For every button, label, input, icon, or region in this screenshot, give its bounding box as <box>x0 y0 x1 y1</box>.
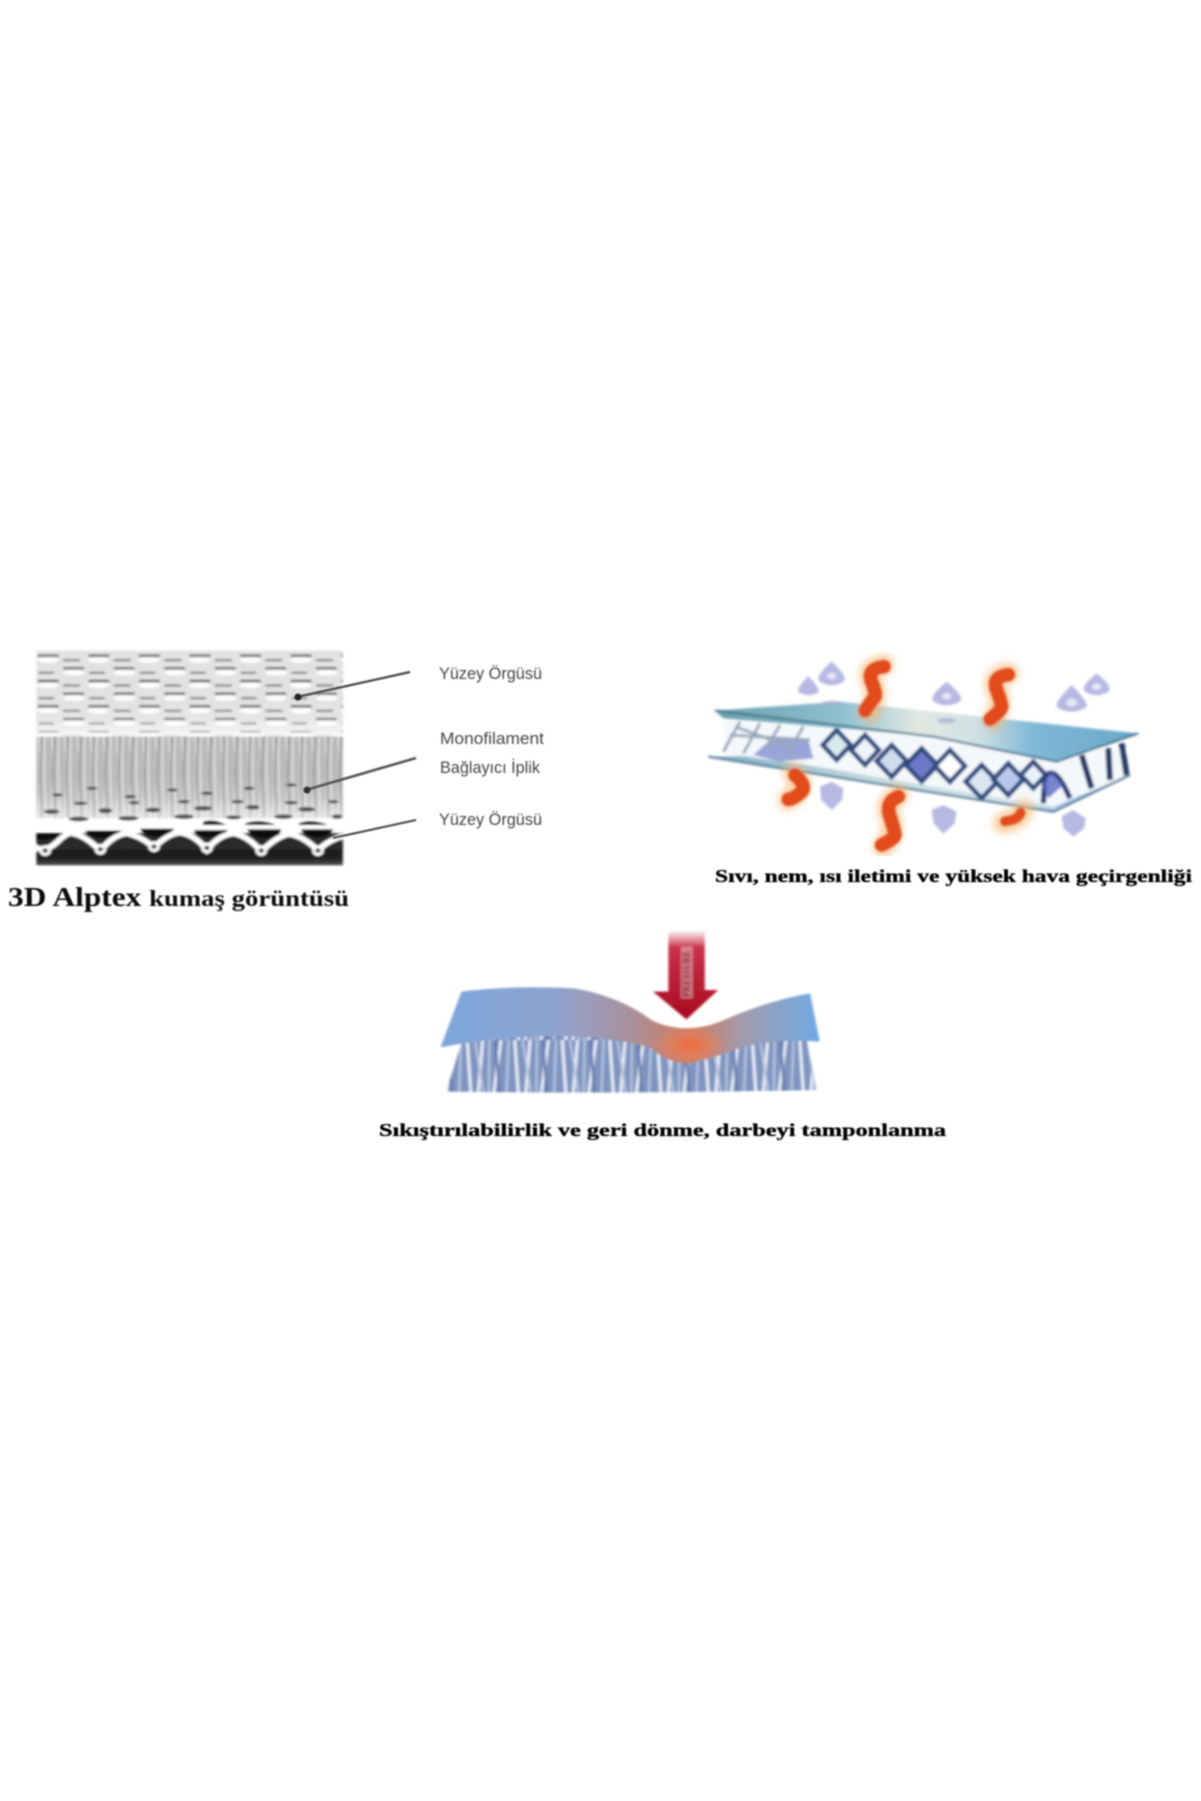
top plate <box>715 702 1138 762</box>
panel: moisture and heat transfer <box>708 661 1192 886</box>
label: monofilament connecting yarn: Bağlayıcı İplik <box>440 758 540 777</box>
image: cushion under pressure <box>440 930 820 1093</box>
arrow: to monofilament yarn <box>304 758 416 794</box>
fibers <box>446 1030 817 1093</box>
flames <box>788 667 1021 845</box>
arrow: to lower surface knit <box>333 820 416 838</box>
label: monofilament connecting yarn <box>440 729 544 777</box>
panel: compressibility and recovery <box>379 930 946 1140</box>
right vertical yarns <box>1082 743 1127 788</box>
left faint yarns <box>723 722 810 755</box>
label: monofilament connecting yarn: Monofilament <box>440 729 544 748</box>
caption: compressibility, recovery, shock absorption: Sıkıştırılabilirlik ve geri dönme, darbeyi tamponlanma <box>379 1120 946 1140</box>
bottom plate <box>708 755 1130 812</box>
pressure arrow <box>653 930 718 1019</box>
image: fabric layers <box>34 651 343 865</box>
flame glows <box>788 665 1023 847</box>
heading: fabric image title: 3D Alptex kumaş görüntüsü <box>8 882 349 912</box>
cushion <box>440 987 820 1063</box>
image: cushion under pressure: PRESSURE <box>681 951 693 997</box>
panel: 3D Alptex fabric cross-section <box>8 651 544 912</box>
drops <box>798 661 1110 837</box>
label: lower surface knit: Yüzey Örgüsü <box>439 810 542 829</box>
image: spacer fabric with heat and drops <box>708 661 1138 847</box>
caption: liquid, moisture, heat and air permeability: Sıvı, nem, ısı iletimi ve yüksek hava geçirgenliği <box>715 866 1192 886</box>
lattice background <box>723 720 1127 807</box>
label: upper surface knit: Yüzey Örgüsü <box>439 664 542 683</box>
lattice <box>823 730 1046 798</box>
arrow: to upper surface knit <box>294 672 410 700</box>
